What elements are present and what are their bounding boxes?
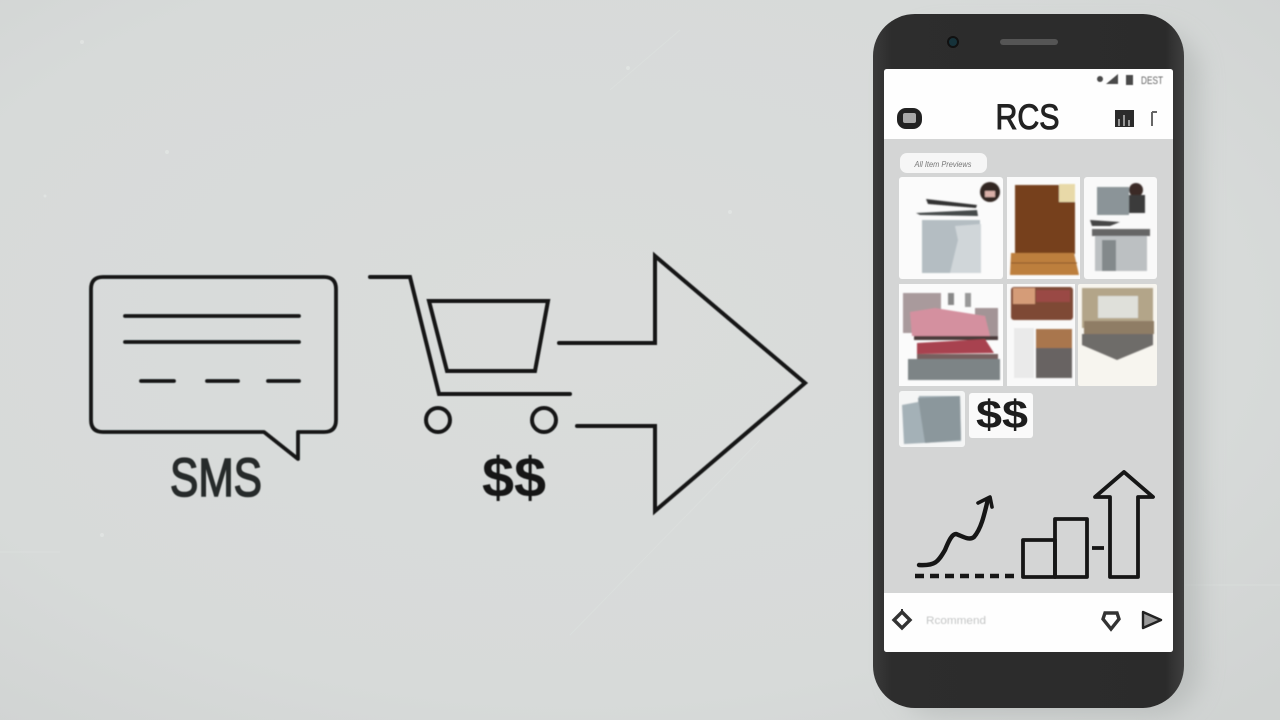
product: wooden cabinet [1007, 177, 1080, 279]
bar chart with up arrow [1023, 472, 1153, 577]
phone body [873, 14, 1184, 708]
phone shadow [895, 30, 1200, 715]
label: dollar signs: $$ [482, 446, 546, 510]
arrow: SMS to RCS [559, 256, 805, 511]
message input bar [884, 593, 1173, 652]
label pill [900, 153, 987, 173]
product: grey folded item [899, 177, 1003, 279]
product: grey appliance stack [1084, 177, 1157, 279]
app header [884, 69, 1173, 139]
icon: camera [948, 37, 958, 47]
price tile [969, 393, 1033, 438]
speaker [1000, 39, 1058, 45]
product: grey bed in room [1078, 284, 1157, 386]
growth line chart [915, 497, 1014, 576]
label: SMS: SMS [170, 448, 262, 508]
input placeholder: Rcommend [926, 615, 986, 627]
icon: send [1143, 612, 1161, 628]
title: RCS: RCS [996, 98, 1060, 137]
status bar [1097, 74, 1163, 87]
icon: voice [1103, 613, 1119, 629]
status bar: DEST [1141, 75, 1163, 87]
icon: chat [897, 108, 922, 129]
product: grey fabric [899, 391, 965, 447]
label pill: All Item Previews [914, 160, 972, 169]
price tile: $$ [976, 393, 1028, 437]
product: pink bedding [899, 284, 1003, 386]
icon: shopping cart [370, 277, 570, 432]
icon: attach [894, 609, 910, 628]
product: room photos [1007, 284, 1075, 386]
icon: chart menu [1115, 110, 1134, 127]
icon: SMS speech bubble [91, 277, 336, 459]
icon: more [1152, 112, 1157, 126]
screen [884, 69, 1173, 652]
phone [873, 14, 1184, 708]
